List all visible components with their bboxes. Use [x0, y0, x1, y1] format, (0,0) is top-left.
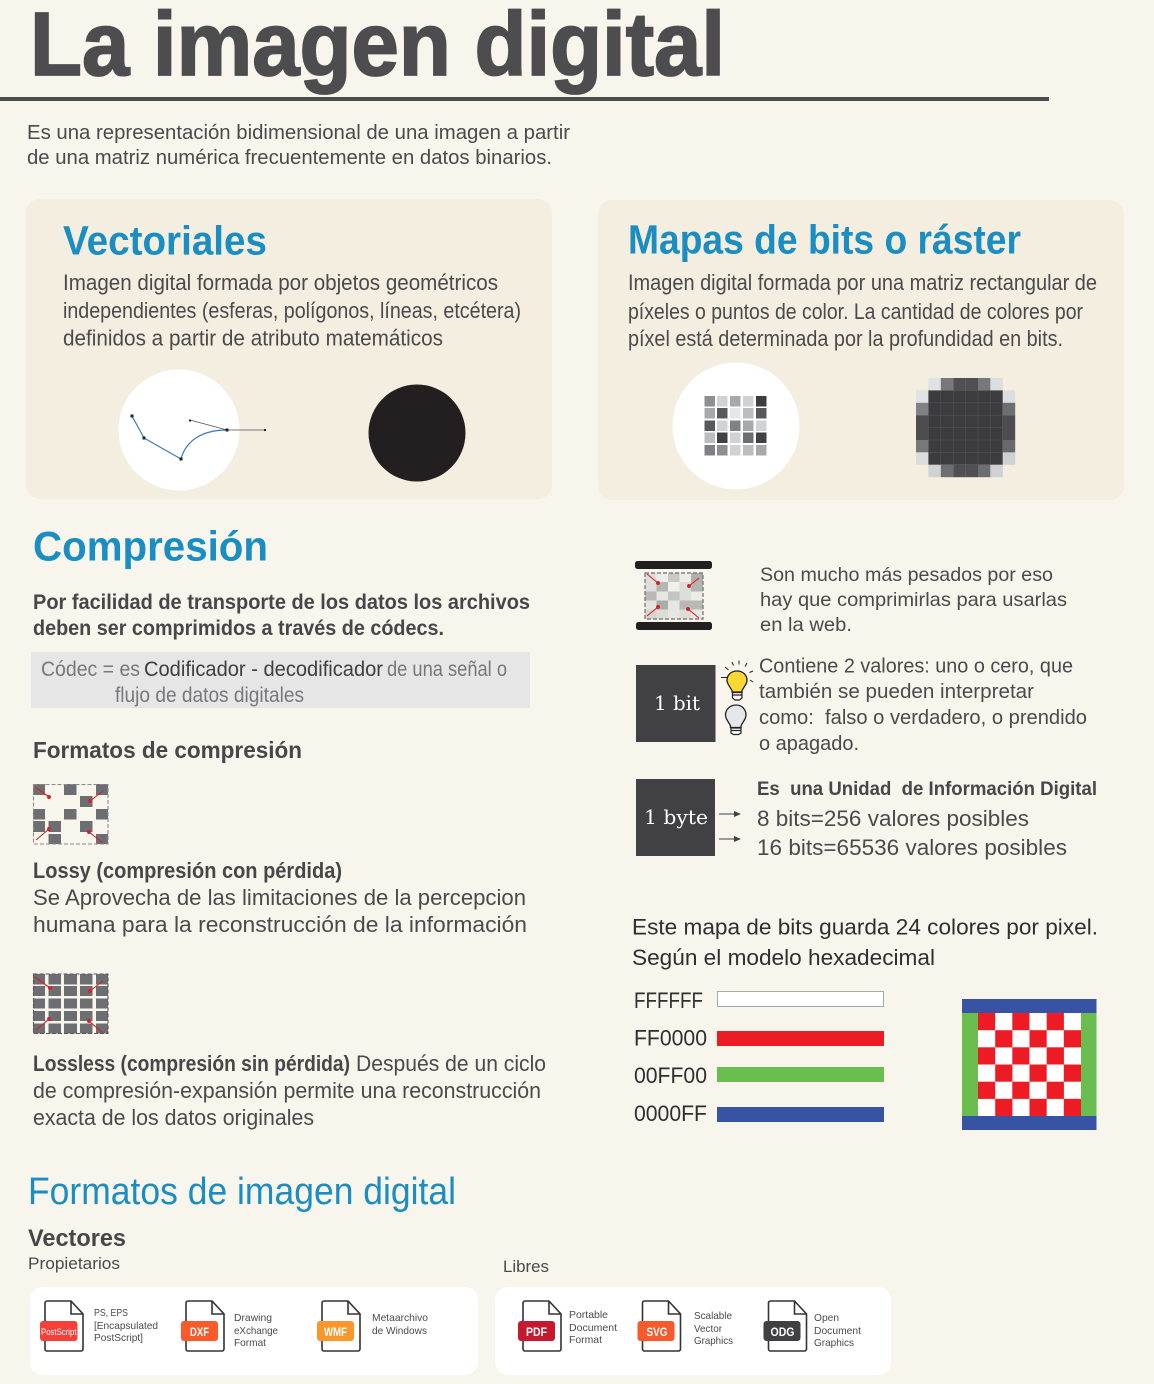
- icon: PostScript file: [40, 1301, 83, 1351]
- text: vectoriales description: definidos a partir de atributo matemáticos: [63, 326, 443, 350]
- text: lossy description: [33, 858, 527, 937]
- text: SVG description: Scalable: [694, 1310, 732, 1322]
- text: transport note: Por facilidad de transporte de los datos los archivos: [33, 590, 530, 614]
- text: heavy files note: Son mucho más pesados por eso: [760, 564, 1053, 586]
- icon: ODG file: [764, 1301, 806, 1351]
- text: transport note: deben ser comprimidos a través de códecs.: [33, 616, 444, 640]
- text: bit description: o apagado.: [759, 732, 859, 755]
- text: 24-bit color note: [632, 914, 1098, 970]
- heading: vectoriales: Vectoriales: [63, 218, 267, 264]
- box: 1 byte: [636, 779, 715, 856]
- icon: pixelated circle: [916, 378, 1015, 477]
- text: ODG description: Document: [814, 1325, 861, 1337]
- text: bit description: como: falso o verdadero, o prendido: [759, 706, 1087, 729]
- text: lossless description: Lossless (compresión sin pérdida): [33, 1051, 350, 1076]
- heading: formatos de compresión: Formatos de compresión: [33, 737, 302, 763]
- text: bit description: también se pueden interpretar: [759, 680, 1034, 703]
- callout: códec definition: Codificador - decodificador: [144, 657, 383, 681]
- heading: compresión: Compresión: [33, 522, 268, 570]
- text: byte description: 16 bits=65536 valores posibles: [757, 835, 1067, 860]
- text: ODG description: Graphics: [814, 1337, 854, 1349]
- panel: proprietary formats: [30, 1287, 478, 1375]
- icon: SVG file: [638, 1301, 680, 1351]
- icon: lit bulb: [721, 660, 753, 700]
- text: lossy description: Lossy (compresión con pérdida): [33, 858, 342, 883]
- text: SVG description: Vector: [694, 1323, 722, 1335]
- callout: códec definition: Códec = es: [41, 657, 140, 681]
- icon: pixel grid on white circle: [672, 362, 800, 490]
- arrows: byte values: [719, 811, 741, 842]
- callout: códec definition: [31, 652, 530, 708]
- text: SVG description: [694, 1310, 733, 1347]
- text: DXF description: Drawing: [234, 1312, 272, 1324]
- icon: unlit bulb: [726, 705, 746, 734]
- icon: lossless grid: [33, 974, 108, 1034]
- text: WMF description: [372, 1312, 428, 1337]
- text: lossless description: exacta de los datos originales: [33, 1105, 314, 1130]
- text: PS, EPS: PostScript]: [94, 1332, 143, 1344]
- callout: códec definition: de una señal o: [387, 657, 507, 681]
- text: mapas de bits description: píxeles o puntos de color. La cantidad de colores por: [628, 299, 1083, 324]
- text: lossy description: humana para la reconstrucción de la información: [33, 912, 527, 937]
- text: heavy files note: en la web.: [760, 614, 852, 636]
- intro text: de una matriz numérica frecuentemente en datos binarios.: [27, 147, 552, 169]
- text: byte description: [757, 778, 1097, 860]
- text: SVG description: Graphics: [694, 1335, 733, 1347]
- callout: códec definition: flujo de datos digitales: [115, 683, 304, 707]
- text: DXF description: [234, 1312, 278, 1349]
- icon: WMF file: [317, 1301, 360, 1351]
- legend item: blue: [634, 1101, 884, 1126]
- legend item: blue: 0000FF: [634, 1101, 707, 1126]
- heading: formatos de imagen digital: Formatos de imagen digital: [28, 1171, 456, 1213]
- icon: SVG file: SVG: [646, 1325, 668, 1339]
- box: 1 bit: 1 bit: [654, 691, 700, 715]
- text: byte description: 8 bits=256 valores posibles: [757, 806, 1029, 831]
- icon: DXF file: [181, 1301, 224, 1351]
- text: PS, EPS: PS, EPS: [94, 1307, 128, 1319]
- legend item: white: FFFFFF: [634, 988, 703, 1013]
- legend item: red: FF0000: [634, 1026, 707, 1050]
- panel: free formats: [495, 1287, 891, 1375]
- text: heavy files note: [760, 564, 1067, 636]
- text: 24-bit color note: Este mapa de bits guarda 24 colores por pixel.: [632, 914, 1098, 940]
- panel: mapas de bits: [598, 200, 1124, 500]
- heading: vectores: Vectores: [28, 1225, 126, 1252]
- icon: black circle: [368, 384, 466, 482]
- text: mapas de bits description: [628, 270, 1097, 351]
- text: lossless description: de compresión-expansión permite una reconstrucción: [33, 1078, 541, 1103]
- chart: checker bitmap: [962, 999, 1096, 1130]
- text: mapas de bits description: píxel está determinada por la profundidad en bits.: [628, 326, 1063, 351]
- text: PDF description: [569, 1309, 617, 1346]
- text: vectoriales description: [63, 270, 521, 350]
- text: PDF description: Portable: [569, 1309, 608, 1321]
- text: DXF description: eXchange: [234, 1325, 278, 1337]
- intro text: Es una representación bidimensional de una imagen a partir: [27, 122, 570, 144]
- text: lossless description: Después de un ciclo: [356, 1051, 546, 1076]
- box: 1 byte: 1 byte: [644, 805, 708, 829]
- text: bit description: Contiene 2 valores: uno o cero, que: [759, 654, 1073, 678]
- text: bit description: [759, 654, 1087, 755]
- panel: vectoriales: [26, 199, 552, 499]
- legend item: green: 00FF00: [634, 1063, 707, 1088]
- legend item: green: [634, 1063, 884, 1088]
- heading: mapas de bits: Mapas de bits o ráster: [628, 216, 1021, 262]
- text: PS, EPS: [Encapsulated: [94, 1320, 158, 1332]
- text: ODG description: [814, 1312, 861, 1349]
- text: transport note: [33, 590, 530, 640]
- text: mapas de bits description: Imagen digital formada por una matriz rectangular de: [628, 270, 1097, 295]
- icon: compressed grid between bars: [635, 561, 712, 630]
- legend: hexadecimal colors: [634, 988, 884, 1126]
- text: 24-bit color note: Según el modelo hexadecimal: [632, 945, 935, 970]
- text: lossless description: [33, 1051, 546, 1130]
- text: PDF description: Document: [569, 1322, 617, 1334]
- icon: WMF file: WMF: [324, 1325, 347, 1339]
- legend item: red: [634, 1026, 884, 1050]
- text: DXF description: Format: [234, 1337, 266, 1349]
- icon: DXF file: DXF: [190, 1325, 209, 1339]
- text: vectoriales description: independientes (esferas, polígonos, líneas, etcétera): [63, 298, 521, 323]
- icon: lossy grid: [33, 784, 108, 844]
- icon: PostScript file: PostScript: [41, 1327, 77, 1337]
- title: [0, 0, 1049, 101]
- intro text: [27, 122, 570, 169]
- label: libres: Libres: [503, 1258, 549, 1276]
- icon: PDF file: PDF: [526, 1325, 547, 1339]
- box: 1 bit: [636, 665, 716, 742]
- text: vectoriales description: Imagen digital formada por objetos geométricos: [63, 270, 498, 295]
- text: byte description: Es una Unidad de Información Digital: [757, 778, 1097, 800]
- icon: ODG file: ODG: [770, 1325, 794, 1339]
- text: ODG description: Open: [814, 1312, 839, 1324]
- text: PDF description: Format: [569, 1334, 602, 1346]
- text: WMF description: de Windows: [372, 1325, 427, 1337]
- legend item: white: [634, 988, 884, 1013]
- text: WMF description: Metaarchivo: [372, 1312, 428, 1324]
- text: PS, EPS: [94, 1307, 158, 1344]
- text: lossy description: Se Aprovecha de las limitaciones de la percepcion: [33, 885, 526, 910]
- text: heavy files note: hay que comprimirlas para usarlas: [760, 589, 1067, 611]
- label: propietarios: Propietarios: [28, 1255, 120, 1273]
- icon: vector path on white circle: [118, 370, 266, 490]
- icon: PDF file: [518, 1301, 561, 1351]
